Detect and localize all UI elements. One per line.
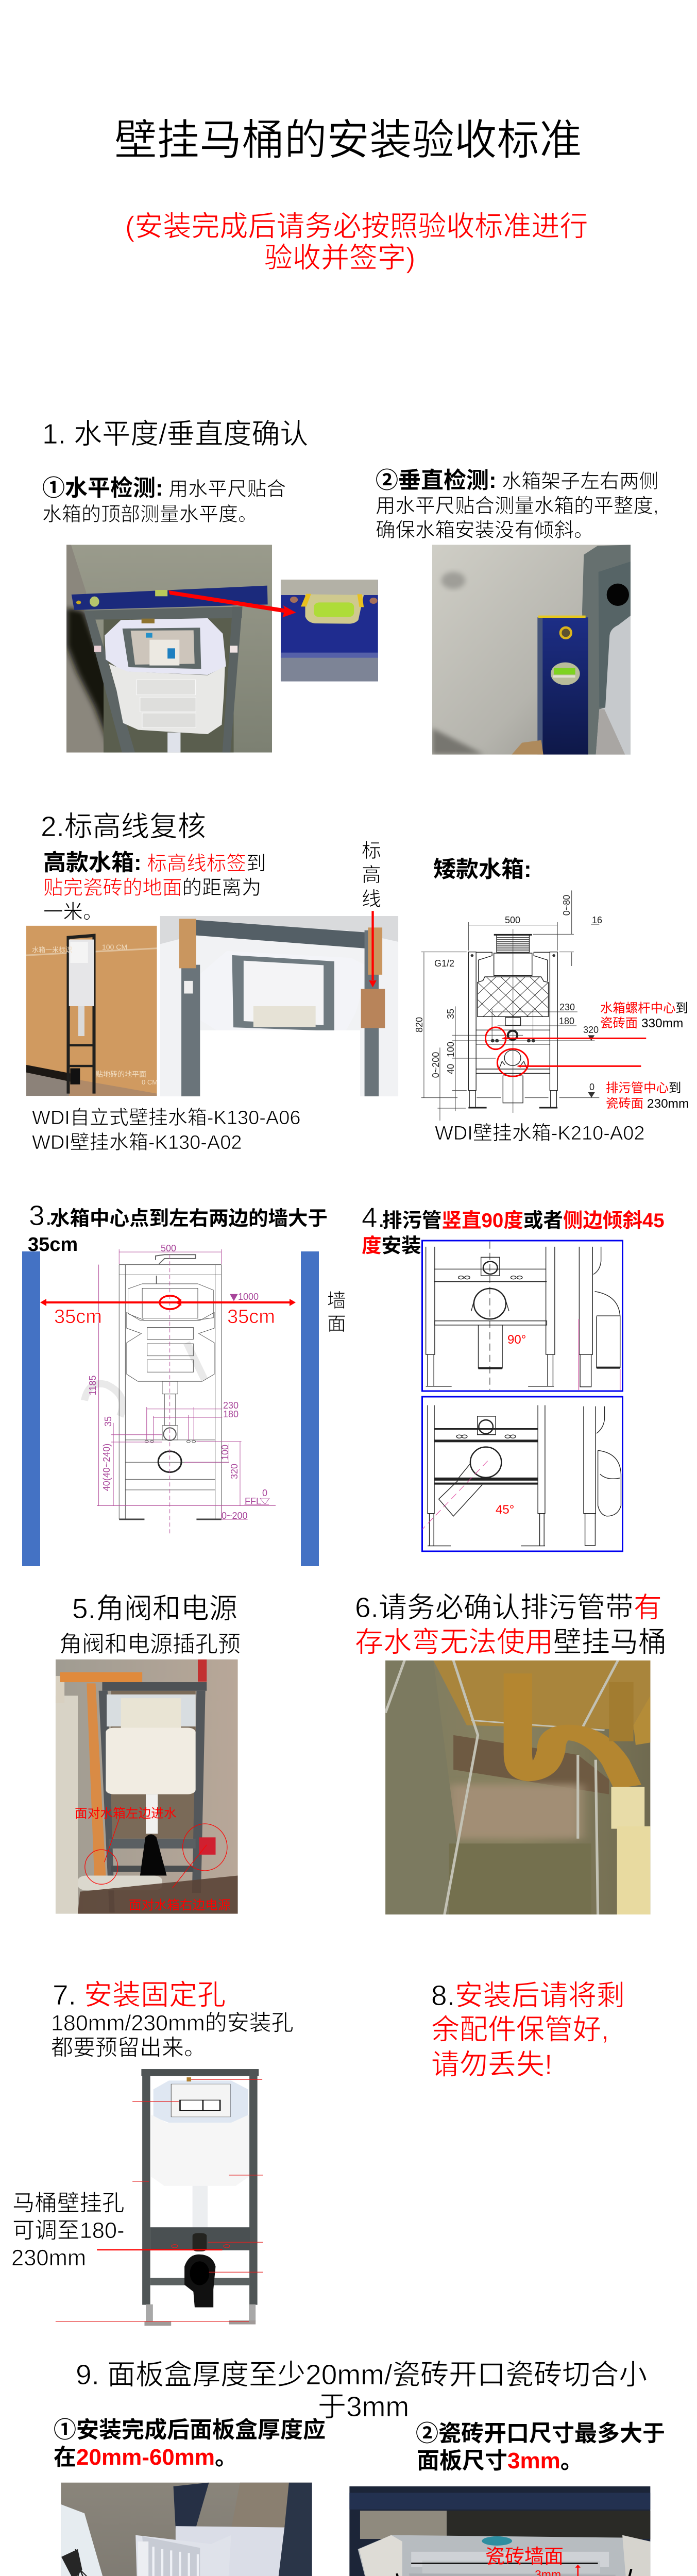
callout: red guide lines and holes: [56, 2079, 263, 2321]
text block: section 7 note: [51, 2011, 294, 2060]
text block: tall cistern: 高款水箱: 标高线标签到: [43, 850, 266, 875]
chart: K210 dimension drawing: 0~200: [431, 1052, 441, 1078]
caption: tall cistern models: [32, 1107, 301, 1154]
text block: vertical check: [376, 468, 659, 541]
chart: cistern elevation drawing: 0: [262, 1488, 267, 1498]
photo: cistern against tan wall: [26, 926, 158, 1096]
text block: hole adjustment: 可调至180-: [12, 2218, 125, 2243]
text block: tall cistern: [43, 850, 266, 923]
chart: K210 dimension drawing: 320: [583, 1025, 599, 1035]
chart: cistern elevation drawing: 100: [220, 1445, 230, 1460]
heading: section 1: 1. 水平度/垂直度确认: [42, 418, 308, 450]
text block: hole adjustment: 马桶壁挂孔: [12, 2191, 125, 2216]
photo: cistern against tan wall: 水箱一米标识: [32, 946, 72, 954]
chart: cistern elevation drawing: [84, 1243, 276, 1536]
label: wall: 墙: [327, 1290, 346, 1311]
callout: 3mm gap arrows: [535, 2565, 618, 2576]
text block: tall cistern: 贴完瓷砖的地面的距离为: [43, 877, 262, 899]
text block: hole adjustment: [11, 2191, 125, 2270]
label: vertical level line: 高: [362, 865, 381, 886]
callout text: bolt centre height: 水箱螺杆中心到: [600, 1002, 688, 1015]
panel: section 3 wall clearance: [22, 1199, 346, 1566]
label: wall: [327, 1290, 346, 1334]
callout: bolt hole arrow: [485, 1027, 646, 1049]
label: tile wall top: 瓷砖墙面: [485, 2546, 564, 2568]
label: right 35cm: 35cm: [227, 1306, 275, 1328]
heading: section 4: 度安装: [362, 1235, 421, 1257]
heading: section 2: 2.标高线复核: [41, 810, 206, 842]
text block: section 8 keep spare parts: [431, 1979, 625, 2080]
callout text: bolt centre height: 瓷砖面 330mm: [600, 1016, 683, 1030]
heading: section 7: 7. 安装固定孔: [53, 1979, 226, 2011]
chart: cistern elevation drawing: 1185: [88, 1376, 98, 1395]
text block: section 8 keep spare parts: 余配件保管好,: [431, 2013, 609, 2045]
heading: section 4: 排污管竖直90度或者侧边倾斜45: [382, 1210, 665, 1232]
subtitle note: (安装完成后请务必按照验收标准进行: [125, 210, 588, 242]
panel: section 4 drain pipe angle: [362, 1201, 665, 1551]
subtitle note: 验收并签字): [264, 242, 415, 274]
text block: section 7 note: 180mm/230mm的安装孔: [51, 2011, 294, 2036]
callout: drain pipe arrow: [497, 1049, 641, 1076]
photo: level bubble close-up: [281, 580, 378, 682]
heading: section 9: 于3mm: [318, 2391, 409, 2422]
heading: section 3: [28, 1199, 328, 1256]
heading: section 9: [76, 2359, 647, 2422]
callout text: drain centre height: 瓷砖面 230mm: [606, 1097, 689, 1111]
heading: section 6: 6.请务必确认排污管带有: [355, 1591, 662, 1623]
text block: horizontal check: ①水平检测: 用水平尺贴合: [42, 476, 286, 501]
photo: vertical check with level: [432, 545, 631, 755]
panel: section 9 panel box thickness: [54, 2359, 665, 2576]
photo: cistern against tan wall: 100 CM: [102, 943, 127, 951]
subtitle note: [125, 210, 588, 274]
chart: cistern elevation drawing: 230: [223, 1400, 239, 1411]
chart: cistern elevation drawing: 320: [229, 1464, 240, 1479]
arrow: distance to left and right wall: [40, 1296, 296, 1309]
text block: horizontal check: 水箱的顶部测量水平度。: [42, 504, 258, 526]
callout text: drain centre height: [606, 1081, 689, 1111]
panel: section 6 drain trap warning: [355, 1591, 667, 1914]
chart: cistern elevation drawing: 40(40~240): [101, 1444, 112, 1491]
heading: section 4: [362, 1201, 665, 1257]
chart: cistern elevation drawing: 180: [223, 1409, 239, 1419]
text block: section 7 note: 都要预留出来。: [51, 2036, 206, 2060]
heading: section 3: 3.: [29, 1199, 53, 1231]
text block: low cistern: 矮款水箱:: [433, 857, 532, 882]
text block: section 8 keep spare parts: 8.安装后请将剩: [431, 1979, 625, 2011]
chart: K210 dimension drawing: 820: [414, 1017, 424, 1032]
photo: cistern against tan wall: 0 CM: [142, 1078, 158, 1086]
text block: section 5 note: 角阀和电源插孔预: [59, 1632, 241, 1657]
text block: section 8 keep spare parts: 请勿丢失!: [431, 2048, 552, 2080]
text block: opening requirement: 面板尺寸3mm。: [417, 2448, 583, 2473]
callout: valve and power markers: [85, 1819, 227, 1888]
photo: S-trap drain pipe: [385, 1660, 650, 1914]
chart: K210 dimension drawing: 500: [505, 915, 520, 925]
caption: tall cistern models: WDI壁挂水箱-K130-A02: [32, 1132, 242, 1154]
text block: vertical check: 用水平尺贴合测量水箱的平整度,: [376, 495, 659, 517]
text block: tall cistern: 一米。: [43, 901, 103, 923]
caption: tall cistern models: WDI自立式壁挂水箱-K130-A06: [32, 1107, 301, 1129]
text block: hole adjustment: 230mm: [11, 2246, 86, 2270]
label: water inlet on left: 面对水箱左边进水: [75, 1806, 177, 1821]
heading: section 3: 水箱中心点到左右两边的墙大于: [50, 1208, 328, 1230]
photo: level on top of cistern: [66, 545, 272, 753]
panel: section 7 mounting holes: [11, 1979, 294, 2326]
chart: K210 dimension drawing: 100: [446, 1042, 456, 1057]
panel: section 1 level and plumb check: [42, 418, 659, 755]
heading: section 6: 存水弯无法使用壁挂马桶: [355, 1626, 667, 1658]
text block: opening requirement: [416, 2421, 665, 2473]
chart: K210 dimension drawing: G1/2: [434, 958, 454, 969]
label: wall: 面: [327, 1313, 346, 1334]
title: 壁挂马桶的安装验收标准: [114, 116, 582, 164]
label: vertical level line: 线: [362, 889, 381, 910]
wall: left: [22, 1251, 40, 1566]
photo: cistern against tan wall: 贴地砖的地平面: [96, 1070, 146, 1078]
chart: K210 dimension drawing: 16: [592, 915, 602, 925]
chart: K210 dimension drawing: 40: [446, 1064, 456, 1074]
callout text: drain centre height: 排污管中心到: [606, 1081, 681, 1095]
chart: tilted 45 degree: [422, 1397, 622, 1551]
photo: panel box side view: [61, 2483, 312, 2576]
photo: tile opening front view: [349, 2486, 650, 2576]
photo: angle valve and socket: [56, 1659, 238, 1914]
panel: section 5 angle valve and power: [56, 1592, 241, 1914]
chart: cistern elevation drawing: 500: [161, 1243, 176, 1253]
caption: low cistern model: WDI壁挂水箱-K210-A02: [435, 1123, 645, 1144]
text block: thickness requirement: 在20mm-60mm。: [54, 2445, 237, 2470]
arrow: level line pointer: [369, 911, 377, 987]
panel: section 2 level line: [26, 810, 689, 1154]
chart: K210 dimension drawing: 230: [559, 1002, 575, 1012]
chart: cistern elevation drawing: 1000: [238, 1292, 259, 1302]
label: power on right: 面对水箱右边电源: [129, 1898, 231, 1912]
label: vertical level line: 标: [362, 840, 381, 862]
chart: vertical 90 degree: [422, 1241, 622, 1391]
chart: vertical 90 degree: 90°: [507, 1333, 526, 1347]
chart: K210 dimension drawing: 0: [589, 1082, 594, 1092]
arrow: to bubble close-up: [168, 590, 296, 617]
photo: wall-hung frame: [141, 2069, 259, 2326]
text block: vertical check: 确保水箱安装没有倾斜。: [376, 519, 594, 541]
chart: K210 dimension drawing: 35: [446, 1009, 456, 1019]
heading: section 3: 35cm: [28, 1234, 78, 1256]
photo: frame with level-line sticker: [160, 916, 398, 1096]
text block: thickness requirement: [54, 2417, 326, 2470]
text block: horizontal check: [42, 476, 286, 526]
chart: cistern elevation drawing: FFL: [245, 1496, 261, 1506]
text block: vertical check: ②垂直检测: 水箱架子左右两侧: [376, 468, 658, 493]
label: left 35cm: 35cm: [54, 1306, 102, 1328]
chart: cistern elevation drawing: 35: [103, 1416, 113, 1427]
label: vertical level line: [362, 840, 381, 910]
heading: section 9: 9. 面板盒厚度至少20mm/瓷砖开口瓷砖切合小: [76, 2359, 647, 2391]
heading: section 4: 4.: [362, 1201, 385, 1233]
chart: K210 dimension drawing: 0~80: [562, 895, 572, 916]
text block: opening requirement: ②瓷砖开口尺寸最多大于: [416, 2421, 665, 2446]
wall: right: [301, 1251, 319, 1566]
chart: cistern elevation drawing: 0~200: [222, 1511, 248, 1521]
chart: tilted 45 degree: 45°: [496, 1503, 514, 1517]
chart: K210 dimension drawing: 180: [559, 1016, 574, 1026]
heading: section 6: [355, 1591, 667, 1658]
text block: thickness requirement: ①安装完成后面板盒厚度应: [54, 2417, 326, 2443]
chart: K210 dimension drawing: [414, 890, 602, 1121]
heading: section 5: 5.角阀和电源: [72, 1592, 237, 1624]
callout text: bolt centre height: [600, 1002, 688, 1030]
